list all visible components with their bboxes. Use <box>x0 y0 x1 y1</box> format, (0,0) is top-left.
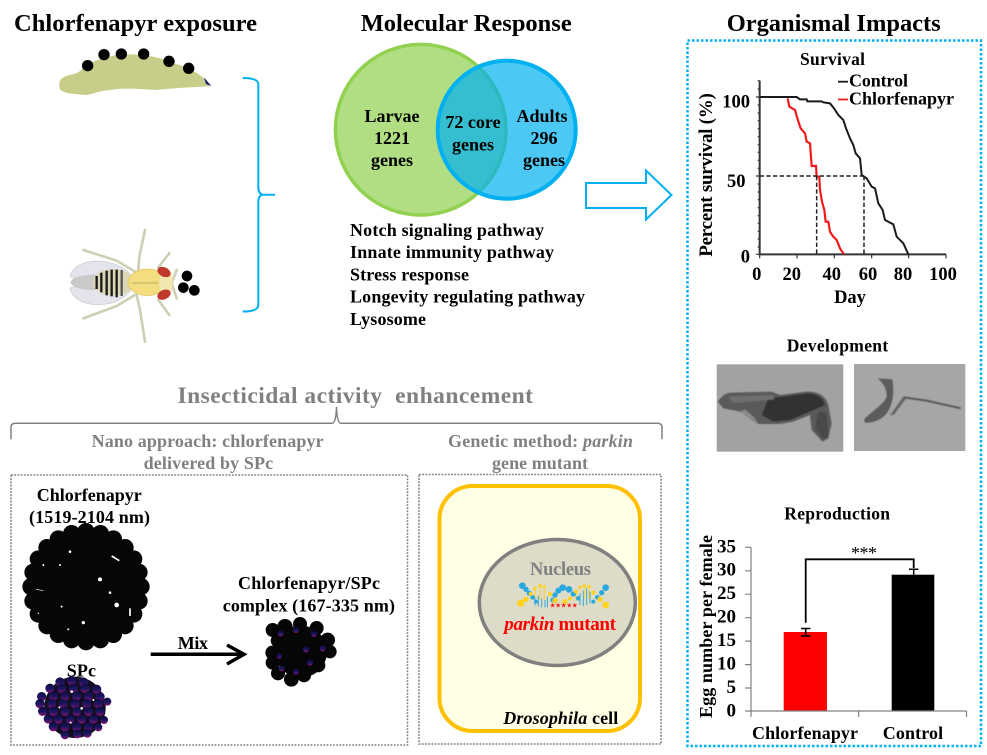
survival x-axis labels: 60 <box>859 265 877 285</box>
survival curve: control <box>760 97 908 254</box>
significance bracket <box>806 559 914 623</box>
survival x-axis labels <box>752 265 957 285</box>
micrograph: treated leg <box>854 364 965 451</box>
survival y-axis labels: 100 <box>722 93 750 113</box>
survival x-axis labels: 20 <box>782 265 801 285</box>
panel: insecticidal activity enhancement <box>11 383 662 745</box>
list of pathways: Stress response <box>350 264 469 284</box>
bar chart y-axis labels: 15 <box>717 630 736 651</box>
arrow: to organismal impacts <box>586 170 672 220</box>
arrow: mix <box>151 645 244 664</box>
bar chart y-axis labels <box>717 536 736 722</box>
venn circle: larvae <box>335 44 506 215</box>
bar chart x-axis labels: Chlorfenapyr <box>752 723 858 743</box>
list of pathways <box>350 220 585 329</box>
survival legend: Chlorfenapyr <box>849 88 954 108</box>
survival legend: Control <box>849 71 908 91</box>
label: parkin mutant: parkin mutant <box>502 614 617 635</box>
venn label: core genes: 72 core <box>445 112 501 132</box>
heading: molecular response: Molecular Response <box>361 10 572 37</box>
micrograph: control leg <box>717 364 843 452</box>
label: chlorfenapyr/SPc complex: Chlorfenapyr/SPc <box>238 573 380 593</box>
venn label: adults: Adults <box>516 106 568 126</box>
survival y-axis labels <box>722 93 750 268</box>
SPc nanoparticle cluster <box>35 676 111 739</box>
heading: organismal impacts: Organismal Impacts <box>727 10 941 37</box>
survival y-axis labels: 50 <box>727 172 746 192</box>
subheading: genetic method: Genetic method: parkin <box>448 431 633 451</box>
panel: genetic method <box>419 474 661 744</box>
venn circle: adults <box>438 61 576 199</box>
bar chart y-axis title: Egg number per female <box>696 535 716 718</box>
chlorfenapyr particle cluster <box>22 523 150 650</box>
reproduction bar chart <box>696 503 966 743</box>
label: chlorfenapyr size: (1519-2104 nm) <box>29 507 150 528</box>
reproduction bar chart: Control <box>883 723 943 743</box>
development section <box>717 336 965 452</box>
bar chart y-axis labels: 20 <box>717 606 736 628</box>
reproduction title: Reproduction <box>784 503 890 523</box>
survival y-axis labels: 0 <box>741 248 750 268</box>
bar chart y-axis labels: 30 <box>717 560 736 580</box>
panel: nano approach <box>11 475 408 745</box>
venn diagram <box>335 44 576 215</box>
panel: organismal impacts box <box>688 40 981 746</box>
survival x-axis labels: 100 <box>929 265 957 285</box>
bar chart y-axis labels: 5 <box>726 677 736 698</box>
subheading: delivered by SPc: delivered by SPc <box>144 453 273 473</box>
icon: larva with droplets <box>59 48 211 95</box>
survival axes <box>756 81 946 258</box>
bracket spanning both approaches <box>11 407 662 439</box>
survival x-axis labels: 80 <box>894 265 912 285</box>
Drosophila cell <box>440 486 640 731</box>
error bars <box>801 569 918 636</box>
survival x-axis labels: 40 <box>822 265 841 285</box>
venn label: adults: genes <box>523 150 565 170</box>
bar chart y-axis labels: 25 <box>717 583 736 604</box>
survival x-axis labels: 0 <box>752 265 761 285</box>
icon: DNA helix with mutation stars <box>517 582 609 610</box>
venn label: core genes: genes <box>452 134 494 154</box>
list of pathways: Longevity regulating pathway <box>350 286 585 306</box>
list of pathways: Lysosome <box>350 309 426 329</box>
label: chlorfenapyr size: Chlorfenapyr <box>37 485 142 505</box>
label: mix: Mix <box>178 633 208 653</box>
survival y-axis title: Percent survival (%) <box>696 93 717 257</box>
subheading: nano approach: Nano approach: chlorfenapyr <box>92 431 324 451</box>
survival title: Survival <box>800 49 865 69</box>
heading: insecticidal activity enhancement: Insecticidal activity enhancement <box>178 383 533 409</box>
label: SPc: SPc <box>67 661 96 681</box>
list of pathways: Innate immunity pathway <box>350 242 554 262</box>
survival legend <box>838 71 954 108</box>
bar chart y-axis labels: 35 <box>717 536 736 558</box>
bar chart axes <box>745 547 966 717</box>
label: nucleus: Nucleus <box>530 560 591 580</box>
bar chart y-axis labels: 10 <box>717 654 736 674</box>
nucleus <box>479 540 635 666</box>
venn label: larvae: Larvae <box>365 106 420 126</box>
icon: DNA helix with mutation stars: ★★★★★ <box>550 602 578 610</box>
venn label: larvae: genes <box>371 150 413 170</box>
survival chart <box>696 49 957 308</box>
subheading: gene mutant: gene mutant <box>492 453 588 473</box>
panel: chlorfenapyr exposure <box>14 10 275 342</box>
survival curve: chlorfenapyr <box>788 98 844 254</box>
label: chlorfenapyr/SPc complex: complex (167-335 nm) <box>223 596 395 617</box>
list of pathways: Notch signaling pathway <box>350 220 544 240</box>
venn label: adults: 296 <box>530 128 558 148</box>
complex particle cluster <box>265 617 337 687</box>
survival x-axis title: Day <box>834 288 867 308</box>
bar: control <box>892 575 934 711</box>
venn label: larvae: 1221 <box>374 128 410 148</box>
bracket joining larvae and adults <box>243 78 275 312</box>
median survival guide lines <box>760 176 864 254</box>
panel: molecular response <box>335 10 585 329</box>
significance stars: *** <box>851 543 877 563</box>
bar: chlorfenapyr <box>784 632 827 711</box>
label: Drosophila cell: Drosophila cell <box>502 708 618 728</box>
bar chart y-axis labels: 0 <box>726 700 736 722</box>
development title: Development <box>787 336 888 356</box>
icon: adult fruit fly with droplets <box>70 230 200 342</box>
heading: chlorfenapyr exposure: Chlorfenapyr exposure <box>14 10 257 37</box>
